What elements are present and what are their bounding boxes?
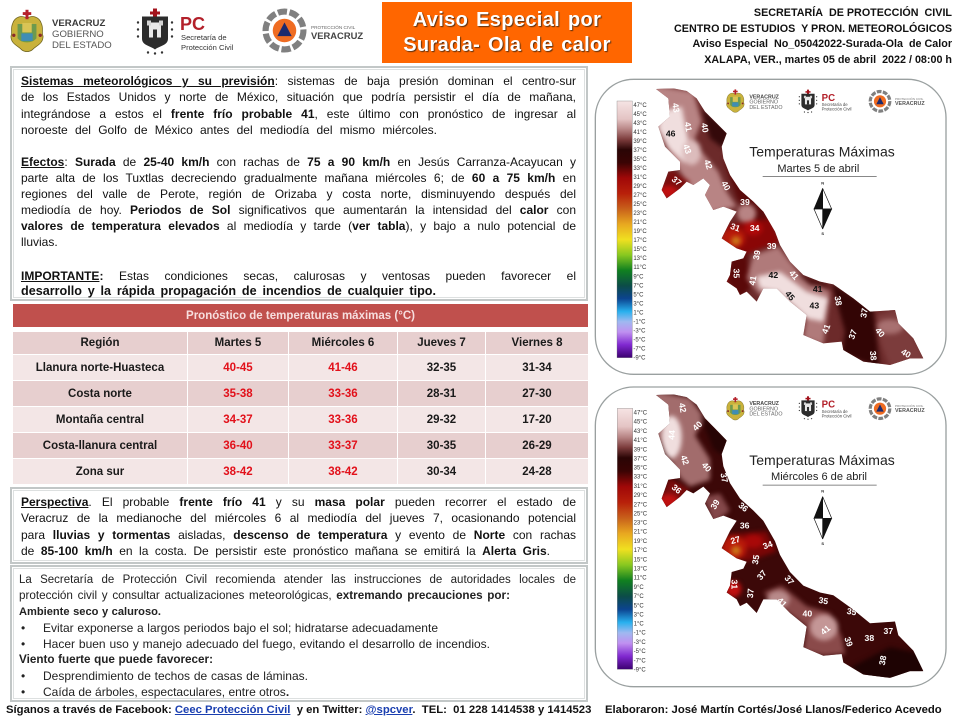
temperature labels xyxy=(666,102,913,361)
temperature labels: 37 xyxy=(755,568,769,582)
panel: sistemas meteorológicos, efectos e importante xyxy=(10,66,588,301)
temperature scale legend: 21°C xyxy=(633,220,647,226)
icon: north arrow xyxy=(814,489,832,546)
map logos xyxy=(727,396,925,420)
table: pronóstico de temperaturas máximas: 36-40 xyxy=(223,440,253,452)
map logos: VERACRUZ xyxy=(749,401,780,407)
temperature scale legend: 45°C xyxy=(634,420,648,426)
temperature scale legend: 35°C xyxy=(633,157,647,163)
table: pronóstico de temperaturas máximas: 34-37 xyxy=(223,414,253,426)
map logos: DEL ESTADO xyxy=(749,412,783,418)
temperature scale legend: 13°C xyxy=(633,256,647,262)
temperature scale legend xyxy=(617,101,647,361)
temperature scale legend: 21°C xyxy=(634,530,648,536)
temperature scale legend: -3°C xyxy=(633,328,646,334)
temperature scale legend: 39°C xyxy=(634,447,648,453)
temperature labels: 36 xyxy=(740,521,750,531)
table: pronóstico de temperaturas máximas xyxy=(13,304,588,484)
temperature scale legend: 11°C xyxy=(634,576,647,582)
temperature labels: 37 xyxy=(719,472,730,483)
table: pronóstico de temperaturas máximas: 17-20 xyxy=(522,414,552,426)
temperature scale legend: 15°C xyxy=(633,247,647,253)
logo: Veracruz Gobierno del Estado: DEL ESTADO xyxy=(52,40,112,51)
text: efectos: lluvias. xyxy=(21,235,58,249)
temperature labels: 40 xyxy=(699,122,711,133)
temperature labels: 38 xyxy=(877,655,888,666)
panel: recomendaciones de Protección Civil: Hacer buen uso y manejo adecuado del fuego, evitando el desarrollo de incendios. xyxy=(43,637,490,651)
table: pronóstico de temperaturas máximas: 24-28 xyxy=(522,466,552,478)
map logos: GOBIERNO xyxy=(749,100,778,106)
map title: Temperaturas Máximas xyxy=(749,143,895,159)
temperature labels: 45 xyxy=(783,289,797,303)
text: importante xyxy=(21,269,576,298)
temperature labels: 40 xyxy=(899,347,913,360)
map logos: Secretaría de xyxy=(822,409,848,414)
text: importante: IMPORTANTE: Estas condiciones secas, calurosas y ventosas pueden favorecer el xyxy=(21,269,576,283)
panel: recomendaciones de Protección Civil: Evitar exponerse a largos periodos bajo el sol; hidratarse adecuadamente xyxy=(43,621,438,635)
logo: PC Secretaría de Protección Civil: Protección Civil xyxy=(181,43,234,52)
table: pronóstico de temperaturas máximas: Miércoles 6 xyxy=(312,337,374,349)
map title xyxy=(749,452,895,486)
temperature scale legend: 27°C xyxy=(633,193,647,199)
header: issuing office xyxy=(674,6,952,66)
temperature labels: 39 xyxy=(708,498,722,511)
temperature labels: 41 xyxy=(818,623,832,637)
temperature scale legend: 3°C xyxy=(634,612,644,618)
icon: north arrow: N xyxy=(821,489,824,494)
temperature scale legend: 9°C xyxy=(634,585,644,591)
temperature scale legend: 37°C xyxy=(634,456,648,462)
table: pronóstico de temperaturas máximas: 35-38 xyxy=(223,388,253,400)
temperature labels: 42 xyxy=(677,402,688,413)
title banner: Surada- Ola de calor xyxy=(403,34,611,56)
logo: PC Secretaría de Protección Civil xyxy=(136,8,234,55)
panel: recomendaciones de Protección Civil: Desprendimiento de techos de casas de láminas. xyxy=(43,669,308,683)
logo: Protección Civil Veracruz xyxy=(262,8,363,52)
temperature scale legend: -9°C xyxy=(634,667,646,673)
title banner xyxy=(382,2,632,63)
temperature labels: 40 xyxy=(873,325,887,339)
table: pronóstico de temperaturas máximas: 30-35 xyxy=(427,440,456,452)
table: pronóstico de temperaturas máximas: 29-32 xyxy=(427,414,456,426)
temperature scale legend: 35°C xyxy=(634,466,648,472)
temperature scale legend: 9°C xyxy=(633,274,644,280)
table: pronóstico de temperaturas máximas: 40-45 xyxy=(223,362,253,374)
temperature labels: 40 xyxy=(700,460,714,474)
text: efectos: mediodía de hoy. Periodos de Sol significativos que aumentarán la intensidad del calor con xyxy=(21,203,576,217)
temperature scale legend: 25°C xyxy=(633,202,647,208)
temperature labels: 35 xyxy=(846,606,857,617)
header: issuing office: XALAPA, VER., martes 05 de abril 2022 / 08:00 h xyxy=(704,54,952,66)
temperature labels: 37 xyxy=(745,588,756,599)
icon: north arrow: N xyxy=(821,180,824,185)
temperature scale legend: 19°C xyxy=(633,229,647,235)
temperature labels: 35 xyxy=(818,595,829,606)
map title: Temperaturas Máximas xyxy=(749,452,895,468)
temperature labels: 34 xyxy=(750,223,760,233)
table: pronóstico de temperaturas máximas: Viernes 8 xyxy=(512,337,562,349)
temperature labels: 40 xyxy=(803,608,812,618)
panel: recomendaciones de Protección Civil: • xyxy=(21,685,25,699)
icon: north arrow: S xyxy=(821,541,824,546)
map logos: GOBIERNO xyxy=(749,406,778,412)
text: efectos: valores de temperatura elevados al mediodía y tarde (ver tabla), y bajo a nulo potencial de xyxy=(21,219,576,233)
header: issuing office: Aviso Especial No_05042022-Surada-Ola de Calor xyxy=(692,38,952,50)
map logos: PROTECCIÓN CIVIL xyxy=(895,403,924,408)
temperature labels: 43 xyxy=(670,102,682,113)
table: pronóstico de temperaturas máximas: Llanura norte-Huasteca xyxy=(36,362,164,374)
temperature labels: 41 xyxy=(813,284,823,294)
temperature labels: 42 xyxy=(769,270,778,280)
map logos: PROTECCIÓN CIVIL xyxy=(895,96,924,101)
temperature labels: 31 xyxy=(730,580,740,589)
logo: Protección Civil Veracruz: VERACRUZ xyxy=(311,30,363,41)
map panel: temperaturas máximas martes 5 de abril xyxy=(594,78,947,375)
text: sistemas meteorológicos y su previsión: de los Estados Unidos y norte de México, situación que podría persistir el día de mañana, xyxy=(21,90,576,104)
temperature scale legend: 37°C xyxy=(633,148,647,154)
temperature scale legend: 27°C xyxy=(634,502,648,508)
temperature scale legend: -5°C xyxy=(634,649,646,655)
temperature scale legend: 7°C xyxy=(634,594,644,600)
temperature scale legend: 31°C xyxy=(633,175,647,181)
table: pronóstico de temperaturas máximas: 31-34 xyxy=(522,362,552,374)
temperature labels: 36 xyxy=(736,500,750,514)
panel: recomendaciones de Protección Civil: Ambiente seco y caluroso. xyxy=(19,606,161,618)
map title: Miércoles 6 de abril xyxy=(771,471,867,483)
temperature labels: 35 xyxy=(750,554,761,565)
icon: north arrow xyxy=(814,180,832,236)
temperature scale legend: 33°C xyxy=(633,166,647,172)
temperature labels: 37 xyxy=(846,328,859,341)
temperature scale legend: 47°C xyxy=(633,103,647,109)
temperature scale legend: -3°C xyxy=(634,640,646,646)
temperature labels: 39 xyxy=(751,249,762,261)
temperature labels: 35 xyxy=(732,269,742,278)
map title xyxy=(749,143,895,177)
map logos: VERACRUZ xyxy=(895,408,925,414)
temperature scale legend: 41°C xyxy=(634,438,648,444)
text: efectos: parte alta de los Tuxtlas decreciendo gradualmente mañana miércoles 6; de 60 a 75 km/h en xyxy=(21,171,576,185)
temperature labels: 37 xyxy=(884,626,893,636)
map logos: DEL ESTADO xyxy=(749,105,783,111)
panel: perspectiva xyxy=(10,487,588,564)
panel: recomendaciones de Protección Civil: • xyxy=(21,621,25,635)
temperature scale legend: 31°C xyxy=(634,484,648,490)
temperature scale legend: 5°C xyxy=(633,292,644,298)
header: issuing office: SECRETARÍA DE PROTECCIÓN CIVIL xyxy=(754,7,952,19)
temperature labels: 39 xyxy=(767,241,777,251)
table: pronóstico de temperaturas máximas: Martes 5 xyxy=(215,337,261,349)
temperature labels: 41 xyxy=(683,121,694,132)
temperature scale legend: 23°C xyxy=(633,211,647,217)
logo: PC Secretaría de Protección Civil: Secretaría de xyxy=(181,33,227,42)
text: sistemas meteorológicos y su previsión: integrándose a estos el frente frío probable 41, este último con pronóstico de ingresar al xyxy=(21,107,576,121)
temperature scale legend: 39°C xyxy=(633,139,647,145)
temperature scale legend: 43°C xyxy=(633,121,647,127)
map logos: VERACRUZ xyxy=(749,94,780,100)
logo: Protección Civil Veracruz: PROTECCIÓN CIVIL xyxy=(311,24,356,30)
temperature scale legend: 47°C xyxy=(634,411,648,417)
logo: Veracruz Gobierno del Estado xyxy=(10,10,112,52)
temperature labels: 42 xyxy=(679,454,691,466)
map panel: temperaturas máximas miércoles 6 de abril xyxy=(594,386,947,688)
table: pronóstico de temperaturas máximas: 27-30 xyxy=(522,388,552,400)
panel: recomendaciones de Protección Civil: Viento fuerte que puede favorecer: xyxy=(19,653,213,666)
panel: perspectiva: de 85-100 km/h en la costa. De persistir este pronóstico mañana se emitirá la Alerta Gris. xyxy=(21,544,550,558)
table: pronóstico de temperaturas máximas: Montaña central xyxy=(56,414,144,426)
temperature scale legend: -1°C xyxy=(633,319,646,325)
panel: recomendaciones de Protección Civil: Caída de árboles, espectaculares, entre otros. xyxy=(43,685,289,699)
text: importante: desarrollo y la rápida propagación de incendios de cualquier tipo. xyxy=(21,284,436,298)
logo: PC Secretaría de Protección Civil: PC xyxy=(180,14,205,34)
table: pronóstico de temperaturas máximas: Costa-llanura central xyxy=(43,440,157,452)
temperature scale legend: 29°C xyxy=(633,184,647,190)
table: pronóstico de temperaturas máximas: 38-42 xyxy=(328,466,358,478)
temperature labels: 37 xyxy=(858,307,870,319)
temperature scale legend xyxy=(617,408,648,673)
table: pronóstico de temperaturas máximas: Zona sur xyxy=(76,466,124,478)
text: sistemas meteorológicos y su previsión: Sistemas meteorológicos y su previsión: sistemas de baja presión dominan el centro-sur xyxy=(21,74,576,88)
panel: perspectiva: Perspectiva. El probable frente frío 41 y su masa polar pueden recorrer el estado de xyxy=(21,495,576,509)
header: issuing office: CENTRO DE ESTUDIOS Y PRON. METEOROLÓGICOS xyxy=(674,23,952,35)
logo: Veracruz Gobierno del Estado: GOBIERNO xyxy=(52,29,104,40)
temperature scale legend: 17°C xyxy=(633,238,647,244)
temperature scale legend: 23°C xyxy=(634,521,648,527)
temperature scale legend: -1°C xyxy=(634,631,646,637)
temperature labels: 42 xyxy=(702,158,715,171)
temperature labels: 38 xyxy=(868,350,879,361)
panel: recomendaciones de Protección Civil xyxy=(10,565,588,702)
temperature scale legend: -7°C xyxy=(633,346,646,352)
map logos xyxy=(727,89,925,113)
text: efectos: regiones del valle de Perote, región de Orizaba y costa norte, disminuyendo después del xyxy=(21,187,576,201)
temperature scale legend: 11°C xyxy=(633,265,647,271)
temperature labels: 40 xyxy=(690,419,704,433)
temperature labels: 43 xyxy=(681,143,694,155)
panel: recomendaciones de Protección Civil: La Secretaría de Protección Civil recomienda atender las instrucciones de autoridades locales de xyxy=(19,574,576,586)
temperature scale legend: 33°C xyxy=(634,475,648,481)
temperature scale legend: 29°C xyxy=(634,493,648,499)
temperature labels: 39 xyxy=(842,635,855,648)
text: sistemas meteorológicos y su previsión: noroeste del Golfo de México antes del mediodía del mismo miércoles. xyxy=(21,123,437,137)
temperature labels: 46 xyxy=(666,128,676,138)
map logos: PC xyxy=(822,400,835,411)
temperature scale legend: -9°C xyxy=(633,355,646,361)
temperature scale legend: -7°C xyxy=(634,658,646,664)
temperature scale legend: 19°C xyxy=(634,539,648,545)
temperature scale legend: 41°C xyxy=(633,130,647,136)
table: pronóstico de temperaturas máximas: Costa norte xyxy=(68,388,132,400)
temperature labels: 27 xyxy=(729,534,741,546)
map of Veracruz temperatures xyxy=(653,85,930,368)
temperature scale legend: 43°C xyxy=(634,429,648,435)
temperature labels: 43 xyxy=(810,301,819,311)
temperature labels xyxy=(666,402,893,666)
temperature labels: 41 xyxy=(820,323,832,335)
title banner: Aviso Especial por xyxy=(413,9,601,31)
table: pronóstico de temperaturas máximas: Región xyxy=(80,337,119,349)
table: pronóstico de temperaturas máximas: 33-36 xyxy=(328,414,358,426)
panel: perspectiva: Veracruz de la medianoche del miércoles 6 al mediodía del jueves 7, ocasionando potencial xyxy=(21,511,576,525)
temperature labels: 31 xyxy=(729,221,742,234)
table: pronóstico de temperaturas máximas: 28-31 xyxy=(427,388,456,400)
temperature labels: 36 xyxy=(670,482,684,496)
temperature labels: 37 xyxy=(782,573,796,587)
temperature scale legend: 25°C xyxy=(634,511,648,517)
table: pronóstico de temperaturas máximas: Jueves 7 xyxy=(417,337,466,349)
temperature scale legend: 5°C xyxy=(634,603,644,609)
temperature labels: 41 xyxy=(775,595,789,609)
text: efectos xyxy=(21,155,576,249)
table: pronóstico de temperaturas máximas: 38-42 xyxy=(223,466,253,478)
panel: recomendaciones de Protección Civil: protección civil y consultar actualizaciones meteorológicas, extremando precauciones por: xyxy=(19,589,510,602)
table: pronóstico de temperaturas máximas: Pronóstico de temperaturas máximas (°C) xyxy=(186,310,415,322)
map of Veracruz temperatures xyxy=(653,391,930,681)
map logos: Protección Civil xyxy=(822,106,852,111)
table: pronóstico de temperaturas máximas: 26-29 xyxy=(522,440,552,452)
panel: perspectiva: para lluvias y tormentas aisladas, descenso de temperatura y evento de Norte con rachas xyxy=(21,528,576,542)
footer: contacto: Síganos a través de Facebook: Ceec Protección Civil y en Twitter: @spcver. TEL: 01 228 1414538 y 1414523 xyxy=(6,704,591,716)
table: pronóstico de temperaturas máximas: 32-35 xyxy=(427,362,456,374)
temperature labels: 41 xyxy=(787,268,801,282)
temperature scale legend: 15°C xyxy=(634,557,648,563)
map logos: VERACRUZ xyxy=(895,101,925,107)
icon: north arrow: S xyxy=(821,231,824,236)
temperature scale legend: 45°C xyxy=(633,112,647,118)
temperature labels: 34 xyxy=(761,539,774,551)
temperature scale legend: -5°C xyxy=(633,337,646,343)
temperature labels: 40 xyxy=(719,179,733,192)
text: sistemas meteorológicos y su previsión xyxy=(21,74,576,137)
table: pronóstico de temperaturas máximas: 33-36 xyxy=(328,388,358,400)
map title: Martes 5 de abril xyxy=(777,163,859,175)
temperature scale legend: 3°C xyxy=(633,301,644,307)
temperature labels: 44 xyxy=(666,430,677,440)
temperature labels: 38 xyxy=(865,633,874,643)
temperature scale legend: 7°C xyxy=(633,283,644,289)
table: pronóstico de temperaturas máximas: 30-34 xyxy=(427,466,456,478)
map logos: PC xyxy=(822,93,835,104)
temperature labels: 39 xyxy=(740,197,750,207)
text: efectos: Efectos: Surada de 25-40 km/h con rachas de 75 a 90 km/h en Jesús Carranza-Acayucan y xyxy=(21,155,576,169)
temperature scale legend: 1°C xyxy=(634,622,644,628)
panel: recomendaciones de Protección Civil: • xyxy=(21,637,25,651)
panel: recomendaciones de Protección Civil: • xyxy=(21,669,25,683)
map logos: Secretaría de xyxy=(822,102,848,107)
table: pronóstico de temperaturas máximas: 33-37 xyxy=(328,440,358,452)
temperature labels: 38 xyxy=(833,295,844,306)
temperature scale legend: 1°C xyxy=(633,310,644,316)
logo: Veracruz Gobierno del Estado: VERACRUZ xyxy=(52,18,105,29)
footer: elaboraron: Elaboraron: José Martín Cortés/José Llanos/Federico Acevedo xyxy=(605,704,942,716)
temperature scale legend: 13°C xyxy=(634,566,648,572)
table: pronóstico de temperaturas máximas: 41-46 xyxy=(328,362,358,374)
temperature labels: 41 xyxy=(747,275,758,286)
map logos: Protección Civil xyxy=(822,413,852,418)
temperature scale legend: 17°C xyxy=(634,548,648,554)
temperature labels: 37 xyxy=(670,174,684,188)
